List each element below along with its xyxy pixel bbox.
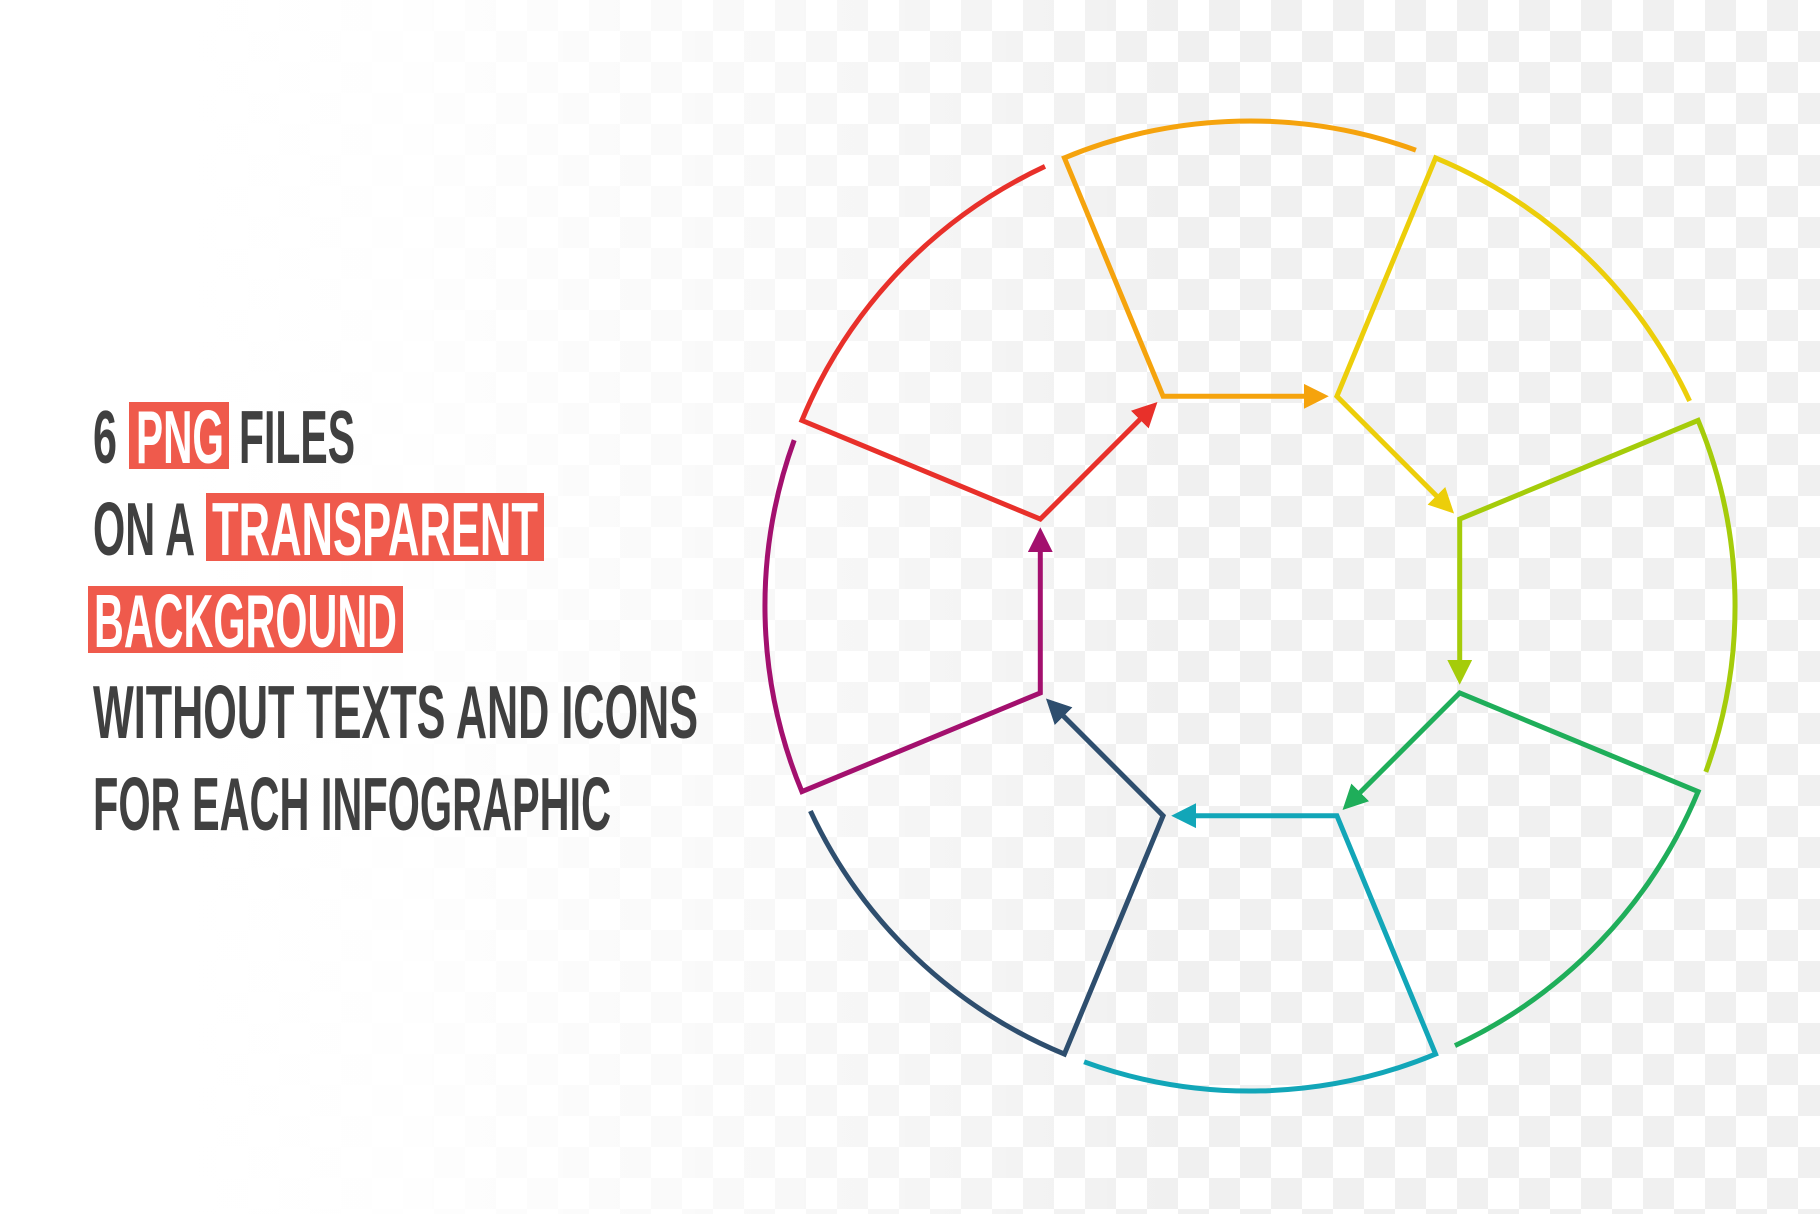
headline text block	[88, 395, 698, 846]
cycle diagram	[765, 121, 1735, 1091]
segment: orange	[1064, 121, 1416, 396]
segment: green	[1348, 693, 1698, 1046]
segment: red	[802, 166, 1152, 519]
line 5: FOR EACH INFOGRAPHIC	[93, 762, 611, 846]
segment: yellow	[1337, 158, 1690, 508]
line 1: PNG	[136, 395, 224, 479]
line 2: TRANSPARENT	[212, 487, 538, 571]
line 1	[93, 395, 355, 479]
highlight box: BACKGROUND	[88, 586, 403, 653]
highlight box: TRANSPARENT	[206, 493, 544, 561]
line 4: WITHOUT TEXTS AND ICONS	[93, 670, 698, 754]
line 3: BACKGROUND	[94, 579, 397, 663]
segment: teal	[1084, 816, 1436, 1091]
line 2	[93, 487, 538, 571]
line 1: 6	[93, 395, 117, 479]
segment: purple	[765, 440, 1040, 792]
segment: lime	[1460, 420, 1735, 772]
line 1: FILES	[239, 395, 355, 479]
segment: navy	[810, 704, 1163, 1054]
highlight box: PNG	[129, 402, 229, 469]
line 2: ON A	[93, 487, 195, 571]
